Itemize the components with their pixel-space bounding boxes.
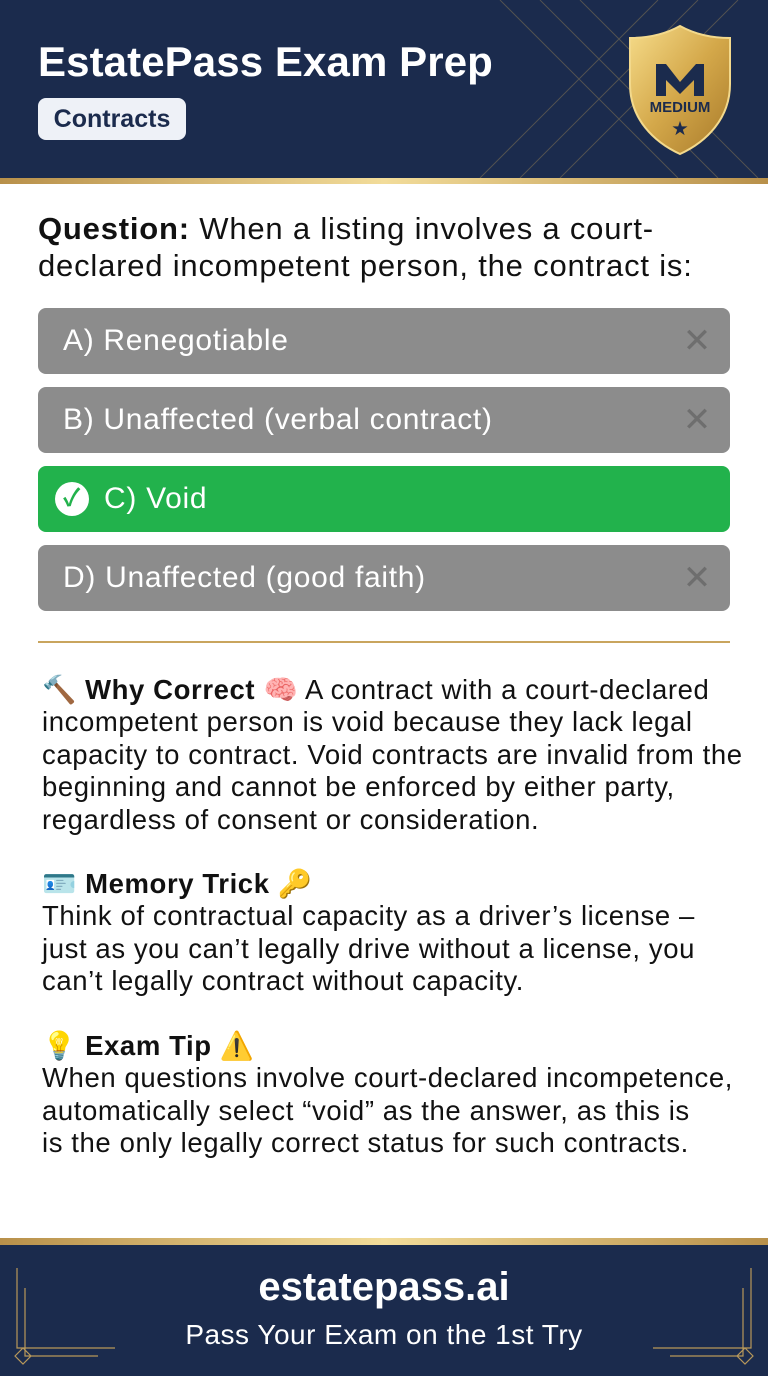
footer brand: estatepass.ai — [258, 1265, 510, 1309]
divider — [38, 641, 730, 643]
exam tip: is the only legally correct status for such contracts. — [42, 1127, 689, 1158]
option A: A) Renegotiable — [63, 324, 289, 357]
exam tip — [42, 1030, 733, 1158]
header — [0, 0, 768, 184]
option B: ✕ — [683, 401, 712, 439]
why correct — [42, 674, 743, 835]
option C correct: ✓ — [63, 485, 81, 512]
badge: medium — [629, 24, 731, 156]
badge: medium: ★ — [672, 121, 688, 138]
title: EstatePass Exam Prep — [38, 38, 493, 85]
why correct: capacity to contract. Void contracts are invalid from the — [42, 739, 743, 770]
memory trick: just as you can’t legally drive without a license, you — [42, 933, 695, 964]
exam tip: automatically select “void” as the answer, as this is — [42, 1095, 690, 1126]
exam tip: 💡 Exam Tip ⚠️ — [42, 1030, 255, 1061]
memory trick — [41, 868, 695, 996]
question: Question: When a listing involves a court- — [38, 211, 654, 246]
option A: ✕ — [683, 322, 712, 360]
question: declared incompetent person, the contract is: — [38, 248, 693, 283]
option C correct — [38, 466, 730, 532]
option B — [38, 387, 730, 453]
memory trick: 🪪 Memory Trick 🔑 — [42, 868, 313, 899]
memory trick: can’t legally contract without capacity. — [42, 965, 524, 996]
memory trick: Think of contractual capacity as a driver’s license – — [42, 900, 695, 931]
option D — [38, 545, 730, 611]
question — [38, 211, 693, 283]
option A — [38, 308, 730, 374]
option D: ✕ — [683, 559, 712, 597]
option B: B) Unaffected (verbal contract) — [63, 403, 493, 436]
exam tip: When questions involve court-declared incompetence, — [42, 1062, 733, 1093]
badge: medium: MEDIUM — [650, 99, 710, 116]
why correct: 🔨 Why Correct 🧠 A contract with a court-declared — [42, 674, 709, 705]
category pill — [38, 98, 186, 140]
gold line top — [0, 178, 768, 184]
footer — [0, 1238, 768, 1376]
footer tagline: Pass Your Exam on the 1st Try — [185, 1319, 583, 1350]
why correct: incompetent person is void because they lack legal — [42, 706, 693, 737]
option D: D) Unaffected (good faith) — [63, 561, 426, 594]
category pill: Contracts — [54, 105, 170, 133]
option C correct: C) Void — [104, 482, 207, 515]
why correct: regardless of consent or consideration. — [42, 804, 539, 835]
why correct: beginning and cannot be enforced by either party, — [42, 771, 675, 802]
